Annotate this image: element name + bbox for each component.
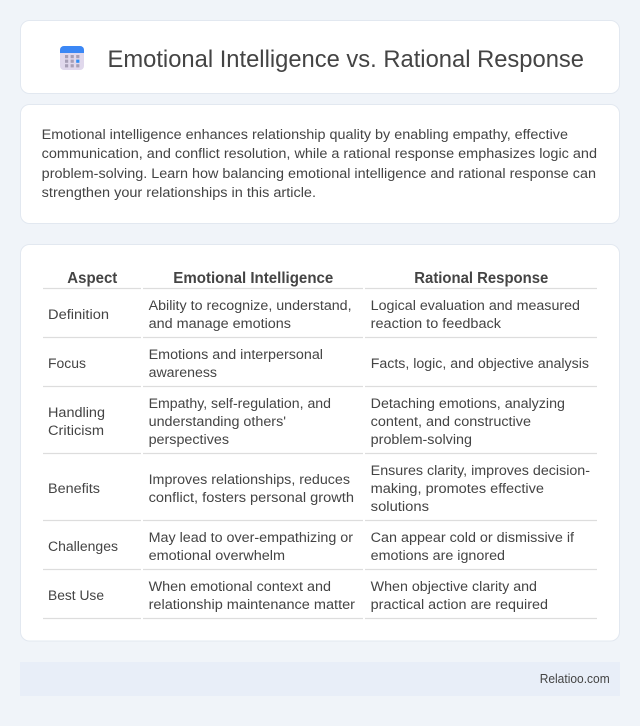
- table row: challenges: Challenges: [48, 539, 118, 555]
- table row: focus: Emotions and interpersonal: [149, 347, 323, 363]
- table row: focus: awareness: [149, 365, 217, 381]
- table row: best use: When emotional context and: [149, 579, 331, 595]
- table row: handling criticism: [43, 396, 597, 454]
- table row: definition: Logical evaluation and measured: [371, 298, 580, 314]
- table header: Emotional Intelligence: [173, 270, 334, 287]
- table row: handling criticism: understanding others': [149, 414, 286, 430]
- table row: handling criticism: Criticism: [48, 423, 104, 439]
- table row: focus: [43, 347, 597, 386]
- table row: handling criticism: Empathy, self-regulation, and: [149, 396, 331, 412]
- table row: best use: [43, 579, 597, 618]
- text block: introduction: strengthen your relationships in this article.: [42, 185, 316, 201]
- table row: handling criticism: Handling: [48, 405, 105, 421]
- table row: benefits: Ensures clarity, improves decision-: [371, 463, 590, 479]
- panel: title card: [20, 20, 620, 94]
- text block: introduction: problem-solving. Learn how balancing emotional intelligence and rational response can: [42, 166, 596, 182]
- table row: best use: practical action are required: [371, 597, 548, 613]
- table header: Rational Response: [414, 270, 549, 287]
- table header: Aspect: [67, 270, 117, 287]
- table row: best use: Best Use: [48, 588, 104, 604]
- table row: handling criticism: perspectives: [149, 432, 229, 448]
- panel: introduction: [20, 104, 620, 224]
- table row: challenges: Can appear cold or dismissive if: [371, 530, 574, 546]
- table row: benefits: conflict, fosters personal growth: [149, 490, 354, 506]
- table row: benefits: making, promotes effective: [371, 481, 544, 497]
- table row: definition: and manage emotions: [149, 316, 291, 332]
- table row: challenges: emotional overwhelm: [149, 548, 285, 564]
- table row: definition: Definition: [48, 307, 109, 323]
- title: Emotional Intelligence vs. Rational Response: [108, 46, 584, 73]
- table row: definition: Ability to recognize, understand,: [149, 298, 352, 314]
- table row: focus: Focus: [48, 356, 86, 372]
- table row: definition: [43, 298, 597, 338]
- table row: challenges: May lead to over-empathizing or: [149, 530, 353, 546]
- text block: introduction: Emotional intelligence enhances relationship quality by enabling empathy, effective: [42, 127, 568, 143]
- table row: definition: reaction to feedback: [371, 316, 502, 332]
- table row: focus: Facts, logic, and objective analysis: [371, 356, 589, 372]
- table row: challenges: emotions are ignored: [371, 548, 505, 564]
- table row: challenges: [43, 530, 597, 570]
- footer: [20, 662, 620, 696]
- text block: introduction: [42, 127, 597, 201]
- table row: benefits: [43, 463, 597, 520]
- footer credit: Relatioo.com: [540, 672, 610, 686]
- table row: benefits: Benefits: [48, 481, 100, 497]
- table row: handling criticism: problem-solving: [371, 432, 472, 448]
- table header: [43, 270, 597, 288]
- table row: benefits: solutions: [371, 499, 429, 515]
- panel: comparison table: [20, 244, 620, 641]
- icon: calendar: [60, 46, 84, 70]
- table row: best use: When objective clarity and: [371, 579, 537, 595]
- table row: handling criticism: content, and constructive: [371, 414, 531, 430]
- table row: benefits: Improves relationships, reduces: [149, 472, 350, 488]
- table row: best use: relationship maintenance matter: [149, 597, 355, 613]
- text block: introduction: communication, and conflict resolution, while a rational response emphasizes logic and: [42, 146, 597, 162]
- table row: handling criticism: Detaching emotions, analyzing: [371, 396, 565, 412]
